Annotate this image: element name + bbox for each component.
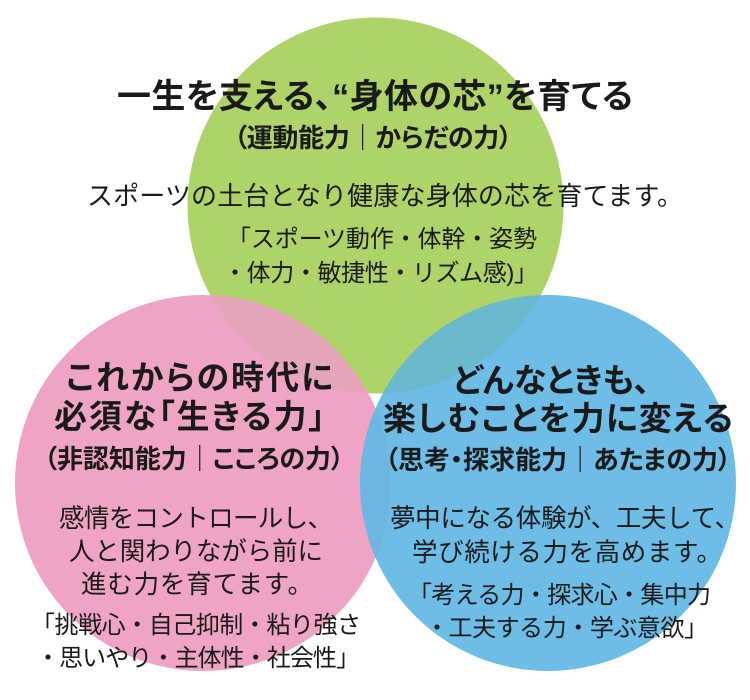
subheading: non-cognitive ability: （非認知能力｜こころの力） [44, 444, 344, 474]
description: enjoyment: 学び続ける力を高めます。 [412, 539, 722, 567]
circle: green [188, 18, 564, 394]
list: life skills: 「挑戦心・自己抑制・粘り強さ [31, 612, 361, 639]
list: enjoyment skills [408, 582, 711, 642]
description: life skills [59, 505, 333, 599]
heading: enjoyment: 楽しむことを力に変える [383, 400, 733, 437]
overlap: green and blue [382, 295, 541, 394]
panel: life skills text [31, 359, 361, 672]
list: enjoyment skills: ・工夫する力・学ぶ意欲」 [425, 615, 708, 642]
list: enjoyment skills: 「考える力・探求心・集中力 [408, 582, 711, 609]
subheading: motor ability: （運動能力｜からだの力） [234, 123, 512, 153]
list: body core skills: 「スポーツ動作・体幹・姿勢 [227, 226, 537, 253]
description: life skills: 人と関わりながら前に [69, 538, 323, 566]
description: life skills: 感情をコントロールし、 [59, 505, 333, 533]
overlap: green and pink [210, 295, 368, 394]
overlap: pink and blue [360, 408, 376, 558]
subheading: thinking ability: （思考・探求能力｜あたまの力） [385, 445, 731, 475]
description: body core: スポーツの土台となり健康な身体の芯を育てます。 [87, 181, 683, 211]
list: body core skills [223, 226, 538, 287]
circle: blue [360, 295, 736, 671]
list: life skills: ・思いやり・主体性・社会性」 [36, 645, 360, 672]
list: body core skills: ・体力・敏捷性・リズム感)」 [223, 260, 538, 287]
heading: enjoyment: どんなときも、 [453, 362, 650, 399]
circle: pink [15, 295, 391, 671]
heading: life skills: 必須な「生きる力」 [54, 398, 325, 435]
panel: body core text [87, 78, 683, 287]
description: enjoyment [390, 505, 740, 567]
panel: enjoyment text [383, 362, 740, 642]
heading: body core: 一生を支える、“身体の芯”を育てる [117, 78, 633, 116]
description: enjoyment: 夢中になる体験が、工夫して、 [390, 505, 740, 533]
heading: life skills [54, 359, 333, 435]
heading: life skills: これからの時代に [66, 359, 333, 396]
heading: enjoyment [383, 362, 733, 437]
list: life skills [31, 612, 361, 672]
description: life skills: 進む力を育てます。 [81, 571, 313, 599]
